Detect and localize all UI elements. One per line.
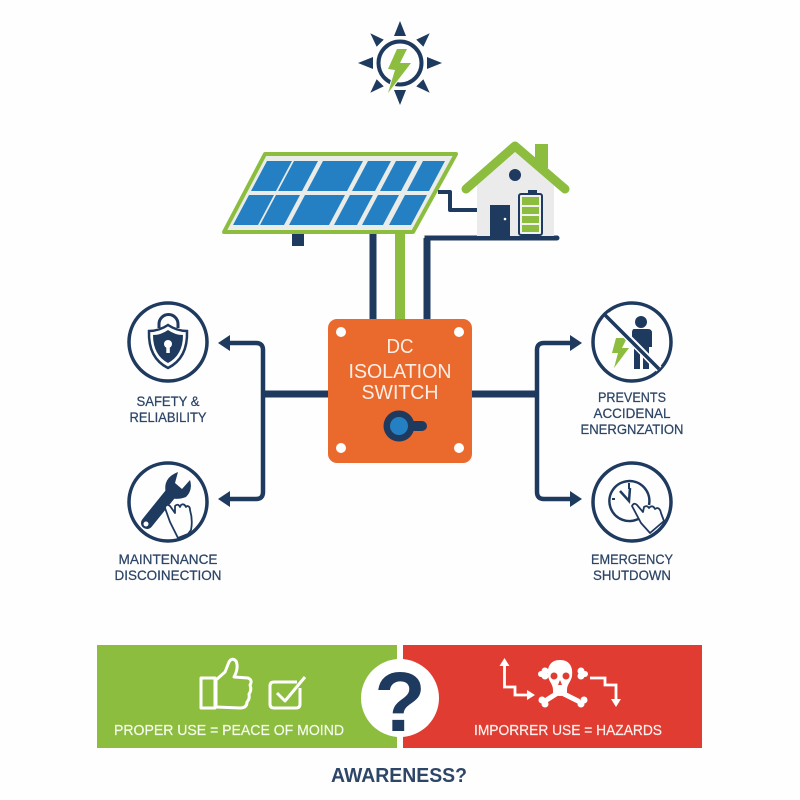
text: safety and reliability: SAFETY &	[136, 393, 200, 409]
title: awareness: AWARENESS?	[331, 765, 467, 787]
text: emergency shutdown: EMERGENCY	[591, 551, 674, 567]
text: proper use label: PROPER USE = PEACE OF MOIND	[114, 722, 344, 739]
icon: safety lock shield	[129, 303, 207, 381]
connector: panel to house	[438, 192, 477, 210]
icon: sun with lightning bolt	[358, 21, 442, 105]
icon: no accidental energization	[593, 303, 671, 381]
text: prevents accidental energization	[580, 389, 684, 437]
panel: DC isolation switch	[328, 319, 472, 463]
icon: question mark circle	[361, 655, 439, 749]
text: prevents accidental energization: ENERGNZATION	[580, 421, 684, 437]
text: improper use label: IMPORRER USE = HAZARDS	[474, 722, 662, 739]
text: maintenance disconnection: MAINTENANCE	[118, 551, 218, 567]
text: prevents accidental energization: ACCIDENAL	[594, 405, 671, 421]
icon: checkbox	[270, 677, 305, 708]
panel: DC isolation switch: SWITCH	[362, 382, 438, 404]
text: maintenance disconnection	[114, 551, 222, 583]
text: prevents accidental energization: PREVENTS	[598, 389, 666, 405]
icon: maintenance wrench and hand	[129, 463, 207, 541]
panel: DC isolation switch: DC	[386, 336, 414, 358]
text: maintenance disconnection: DISCOINECTION	[114, 567, 222, 583]
arrow: hazard rising	[500, 658, 535, 700]
icon: emergency shutdown clock and hand	[593, 463, 671, 541]
panel: DC isolation switch: ISOLATION	[348, 361, 452, 383]
text: safety and reliability: RELIABILITY	[130, 409, 207, 425]
wires: panel and house to switch	[370, 232, 557, 322]
connectors: switch to benefit icons	[218, 335, 582, 507]
icon: house with battery	[466, 144, 565, 236]
panel: improper use	[403, 645, 702, 748]
text: emergency shutdown	[591, 551, 674, 583]
icon: thumbs up	[201, 659, 251, 708]
solar panel	[224, 154, 456, 246]
text: safety and reliability	[130, 393, 207, 425]
text: emergency shutdown: SHUTDOWN	[593, 567, 671, 583]
icon: question mark circle: ?	[374, 655, 426, 749]
panel: proper use	[97, 645, 397, 748]
icon: skull and crossbones	[538, 660, 588, 708]
arrow: hazard falling	[590, 678, 621, 707]
switch knob	[384, 410, 427, 442]
